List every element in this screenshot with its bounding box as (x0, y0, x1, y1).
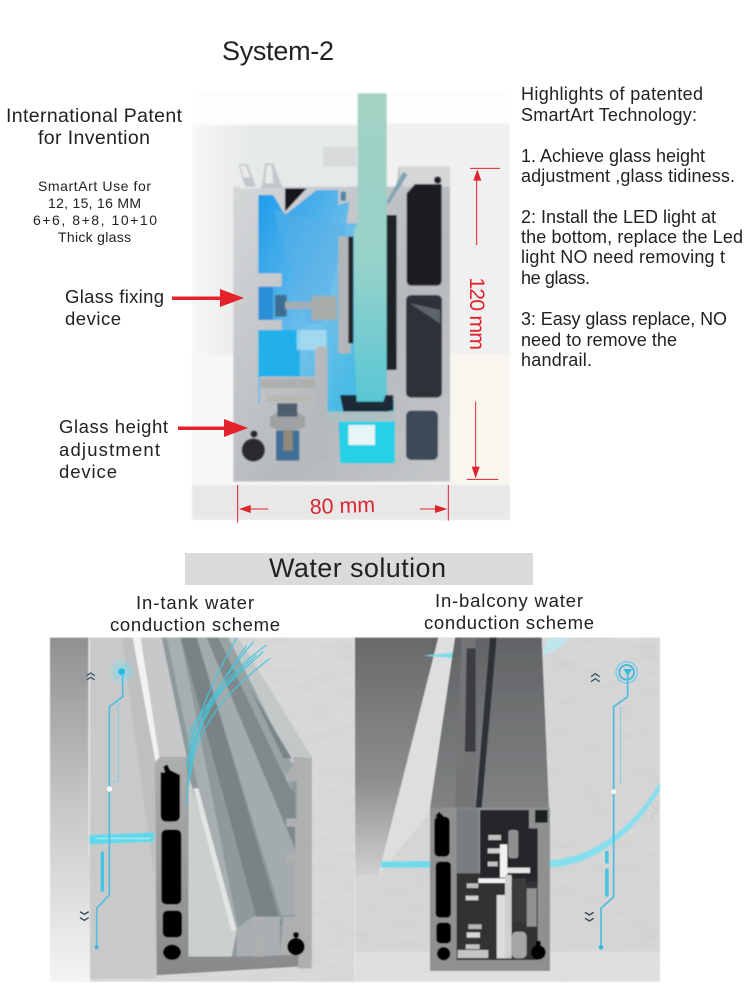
icon: in-balcony circuit line (585, 662, 658, 950)
dimension: 80 mm width: 80 mm (309, 493, 375, 519)
label: glass fixing device: device (65, 308, 121, 329)
glass thickness note: SmartArt Use for (38, 178, 151, 194)
highlights text block: SmartArt Technology: (521, 105, 697, 125)
highlights text block: 2: Install the LED light at (521, 207, 716, 227)
caption: in-balcony: conduction scheme (424, 612, 594, 633)
photo: in-balcony water conduction (355, 638, 660, 982)
photo: in-tank water conduction (50, 638, 355, 982)
highlights text block: handrail. (521, 350, 592, 370)
highlights text block: light NO need removing t (521, 247, 725, 267)
highlights text block: the bottom, replace the Led (521, 227, 743, 247)
label: glass height adjustment device: adjustment (59, 439, 160, 460)
caption: in-tank: conduction scheme (110, 614, 280, 635)
arrow: glass height adjustment device (178, 419, 248, 437)
section heading: water solution: Water solution (269, 553, 446, 583)
glass thickness note: Thick glass (58, 229, 131, 245)
caption: in-tank: In-tank water (136, 592, 254, 613)
caption: in-balcony: In-balcony water (435, 590, 583, 611)
highlights text block: 1. Achieve glass height (521, 146, 705, 166)
icon: in-tank circuit line (80, 662, 132, 949)
dimension: 80 mm width (238, 485, 448, 523)
label: glass height adjustment device: device (59, 461, 117, 482)
highlights text block: Highlights of patented (521, 84, 703, 104)
label: glass height adjustment device: Glass height (59, 416, 168, 437)
section heading: water solution (185, 553, 533, 585)
glass thickness note: 6+6, 8+8, 10+10 (33, 212, 157, 228)
title: System-2 (222, 36, 334, 66)
patent heading: International Patent (6, 105, 183, 127)
label: glass fixing device: Glass fixing (65, 286, 164, 307)
dimension: 120 mm height (465, 168, 500, 479)
highlights text block: 3: Easy glass replace, NO (521, 309, 727, 329)
highlights text block: need to remove the (521, 330, 677, 350)
highlights text block: he glass. (521, 268, 590, 288)
glass thickness note: 12, 15, 16 MM (48, 195, 141, 211)
dimension: 120 mm height: 120 mm (465, 277, 489, 350)
highlights text block: adjustment ,glass tidiness. (521, 166, 735, 186)
patent heading: for Invention (38, 127, 150, 149)
arrow: glass fixing device (172, 289, 244, 307)
photo: glass rail cross section (192, 93, 510, 520)
icon: water flow arcs (187, 638, 270, 805)
